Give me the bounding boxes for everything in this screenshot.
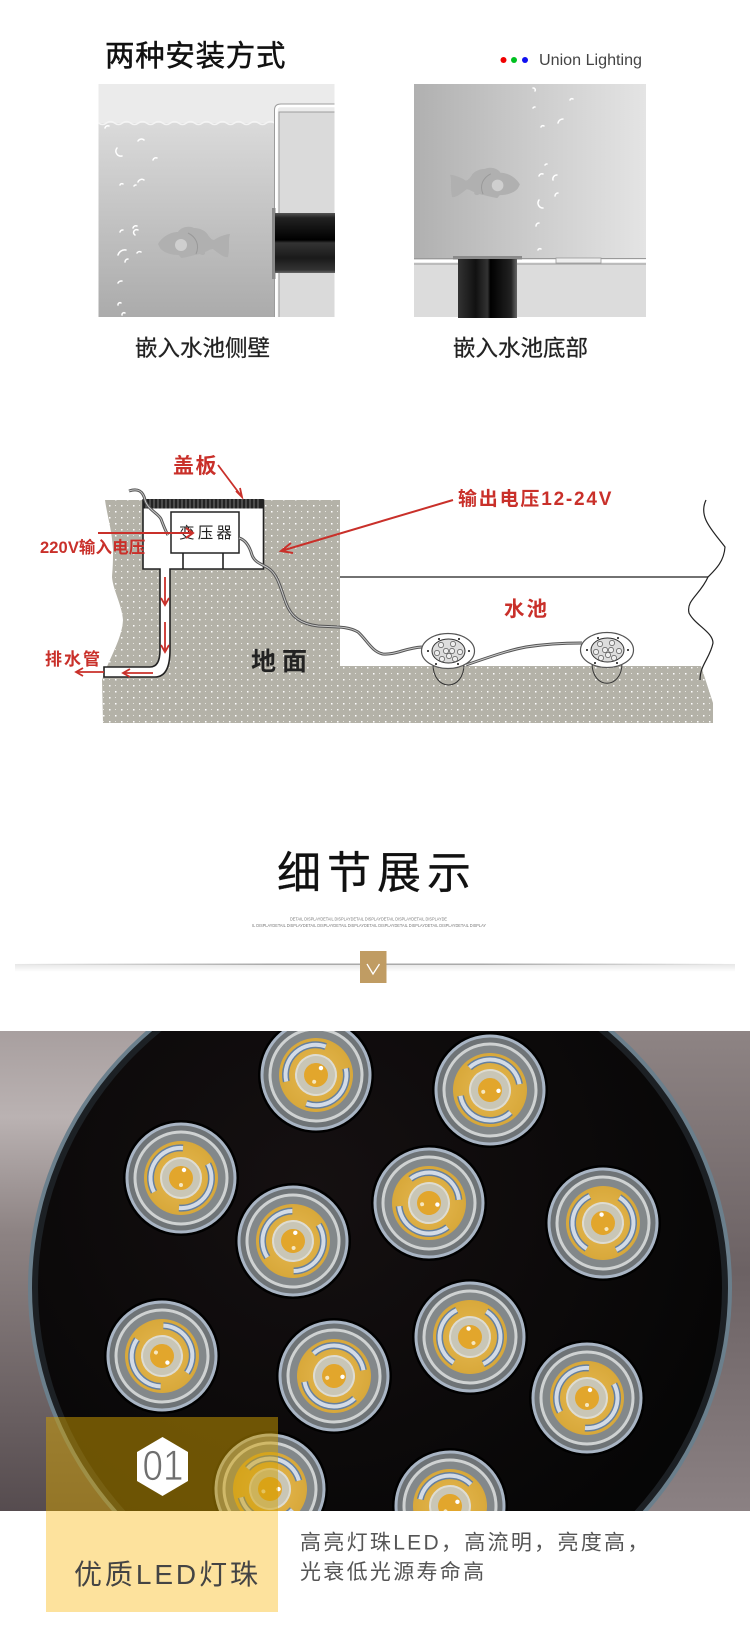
pipe [458,259,517,318]
underwater light 1 [422,634,474,685]
label: input voltage: 220V输入电压 [40,537,145,557]
bubbles [533,88,573,250]
transformer: 变压器 [179,524,235,542]
label: cover plate: 盖板 [173,455,218,478]
bubbles [105,126,157,315]
water [98,123,275,317]
subheading: tiny English lines: IL DISPLAYDETAIL DISPLAYDETAIL DISPLAYDETAIL DISPLAYDETAIL DISPLAYDETAIL DISPLAYDETAIL DISPLAYDETAIL DISPLAY [252,923,486,928]
label: ground: 地面 [251,648,313,676]
fish [158,227,230,258]
wall [279,112,334,317]
transformer pit [104,500,264,677]
transformer [171,512,239,569]
label: drain pipe: 排水管 [45,649,102,669]
subheading: tiny English lines: DETAIL DISPLAYDETAIL DISPLAYDETAIL DISPLAYDETAIL DISPLAYDETAIL DISPLAYDE [290,916,447,922]
feature description: 光衰低光源寿命高 [300,1561,486,1584]
underwater light 2 [580,632,634,683]
panel: side wall installation [98,84,335,317]
steel housing [0,1031,146,1511]
label: pool: 水池 [504,598,549,621]
feature card: 01 [46,1417,278,1612]
label: output voltage: 输出电压12-24V [458,487,613,510]
diagram: wiring cross-section [40,455,725,723]
heading: detail display: 细节展示 [277,849,477,898]
icon: hexagon badge: 01 [142,1442,184,1490]
title: installation methods: 两种安装方式 [105,40,286,73]
panel: pool floor installation [414,84,646,318]
translucent card top [46,1417,278,1511]
feature description [300,1532,651,1584]
wavy cut line [689,500,725,680]
ground [102,500,713,723]
pipe [275,213,335,273]
card bottom [46,1511,278,1612]
feature description: 高亮灯珠LED，高流明，亮度高， [300,1532,651,1554]
photo: LED lamp close-up [0,1031,750,1511]
caption: pool floor: 嵌入水池底部 [453,336,588,361]
caption: side wall: 嵌入水池侧壁 [135,336,270,361]
black well [38,1031,722,1511]
red arrows [76,465,453,677]
icon: down chevron badge [360,951,386,983]
brand: Union Lighting: Union Lighting [539,52,642,69]
rim [28,1031,732,1511]
fish [450,168,520,198]
LED beads [104,1031,661,1511]
cover plate [143,499,264,508]
cables [129,490,582,665]
floor [414,261,646,317]
divider with shadow [15,964,735,972]
icon: hexagon badge [137,1437,188,1496]
water level [340,576,708,578]
card title: 优质LED灯珠 [74,1559,258,1590]
subheading: tiny English lines [252,916,486,928]
